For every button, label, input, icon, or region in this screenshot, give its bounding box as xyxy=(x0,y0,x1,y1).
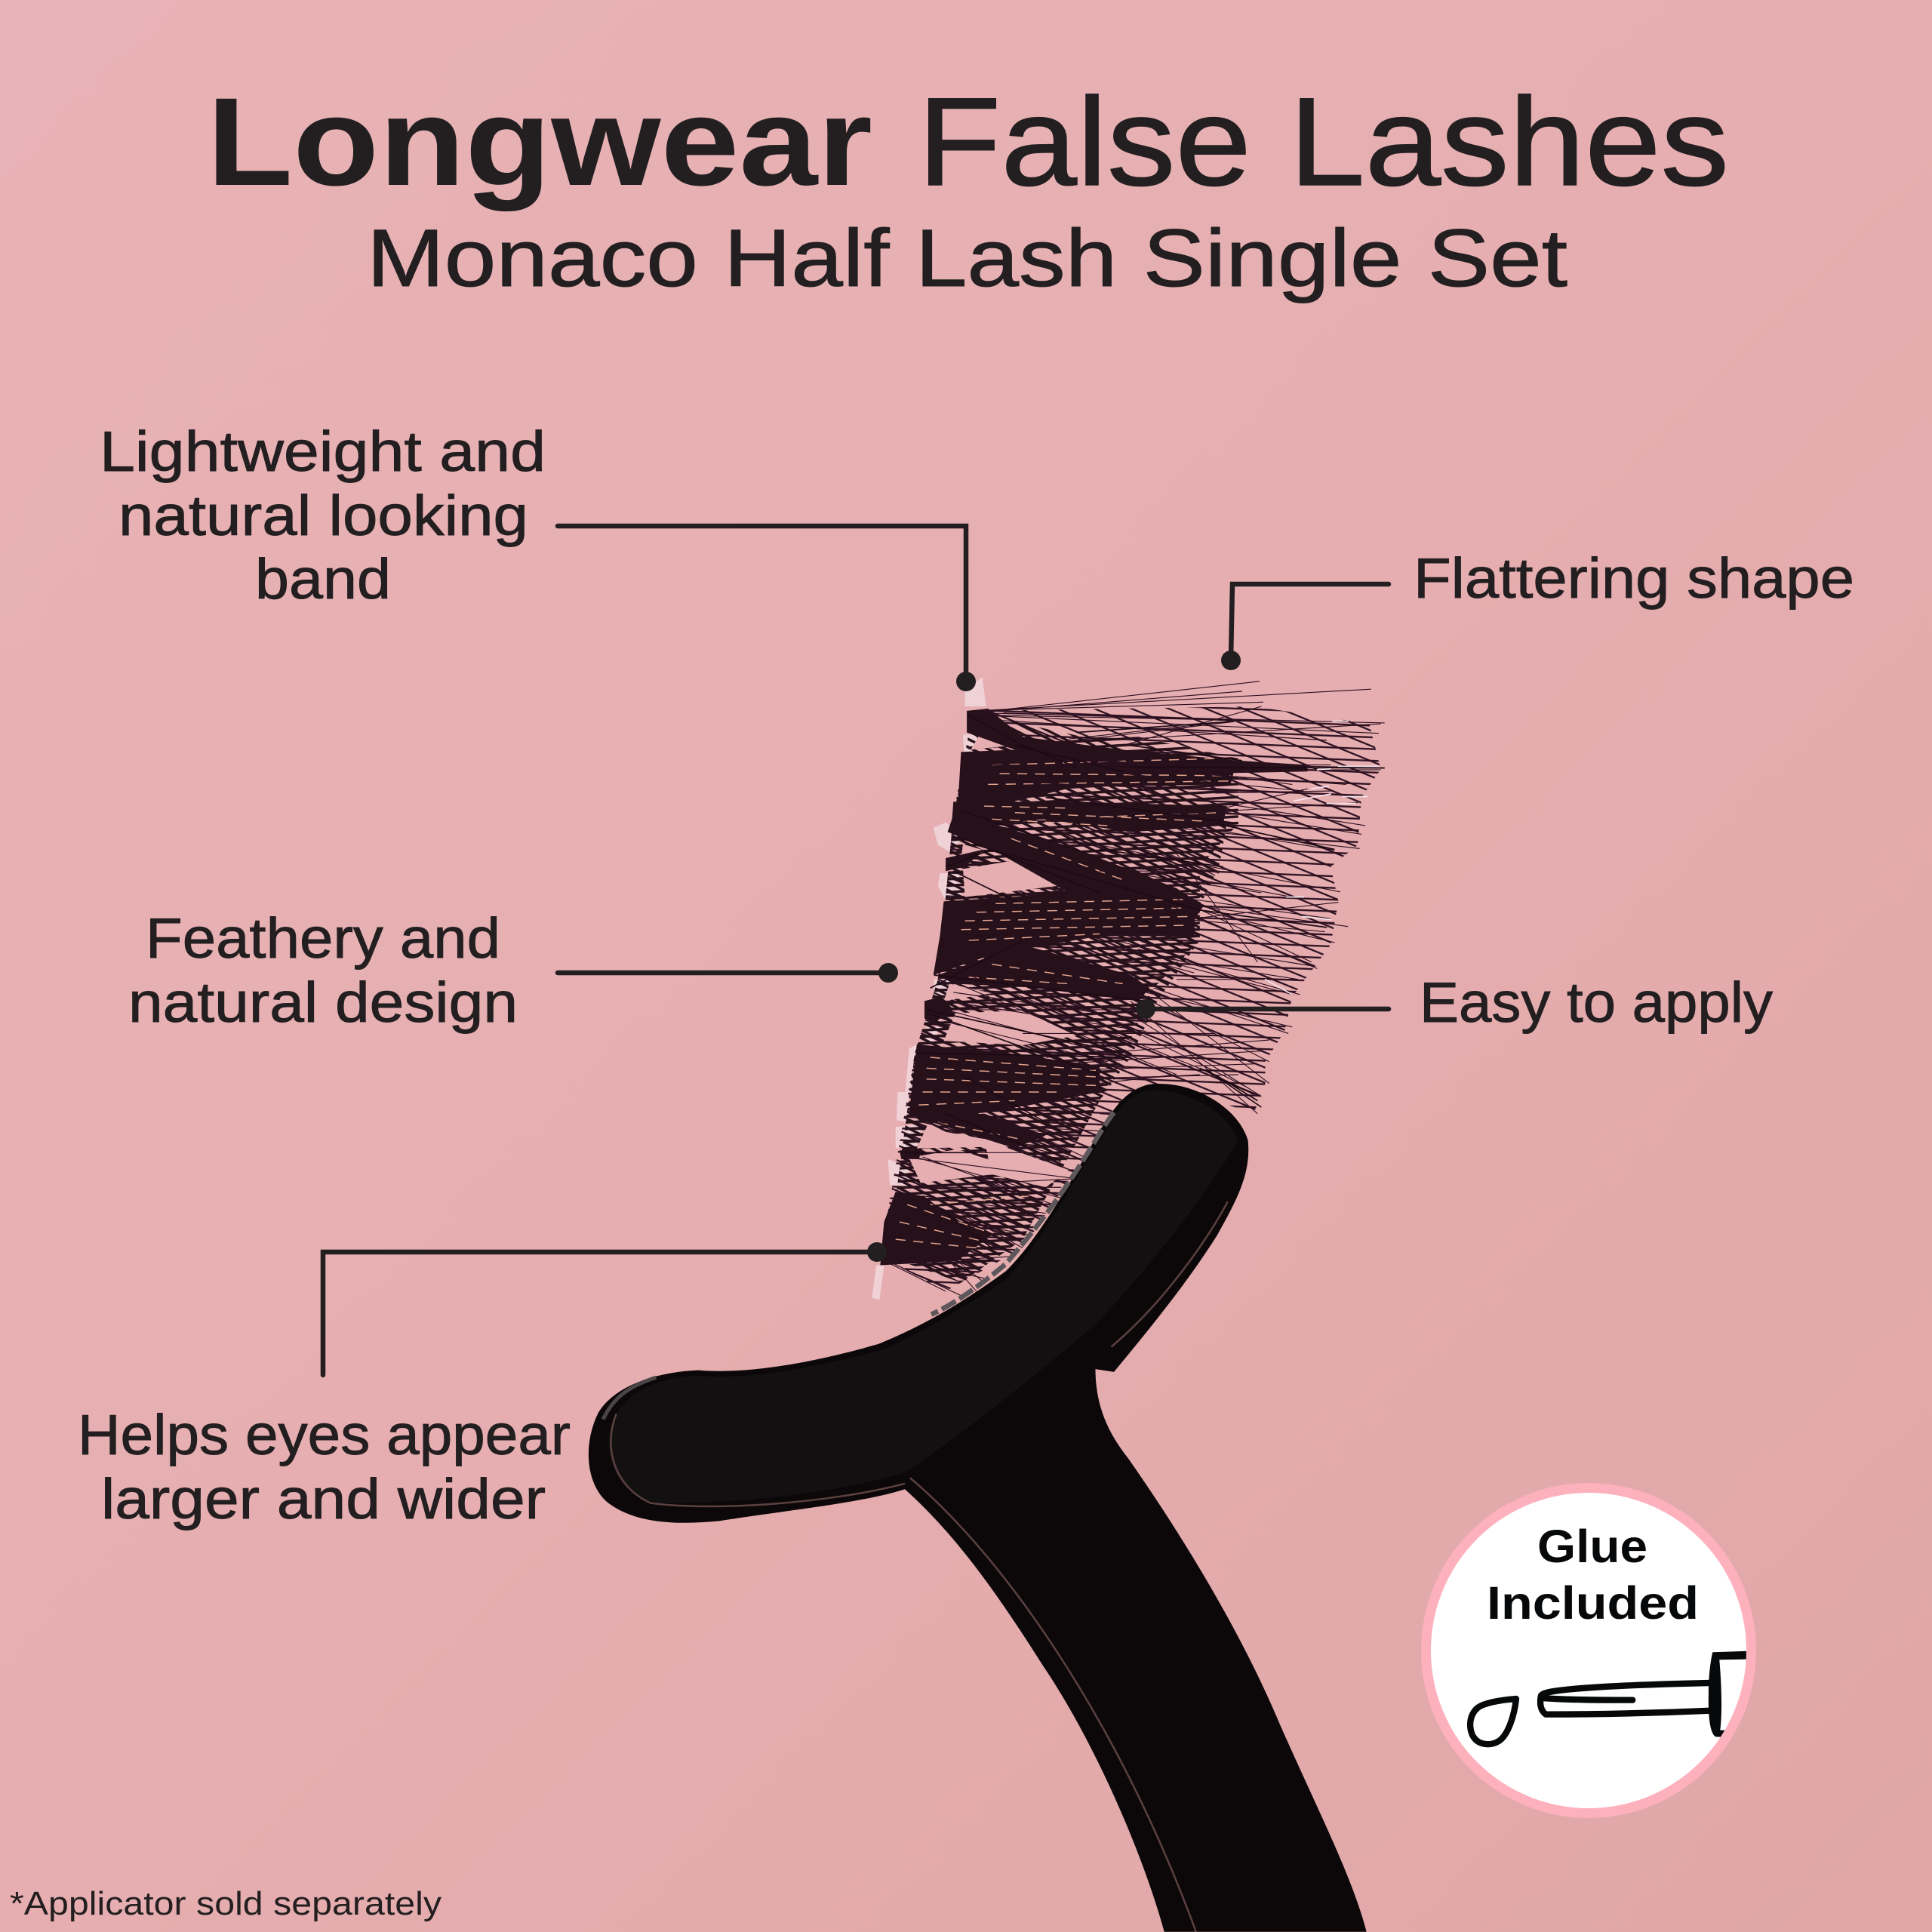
label: natural looking xyxy=(118,484,528,547)
callout: flattering shape xyxy=(1221,546,1854,670)
label: Helps eyes appear xyxy=(78,1403,571,1466)
leader line xyxy=(558,526,966,679)
footnote: *Applicator sold separately xyxy=(10,1885,441,1922)
leader line xyxy=(323,1252,875,1375)
callout: easy to apply xyxy=(1136,971,1774,1034)
highlight on pad xyxy=(603,1377,656,1420)
brown rim lines xyxy=(611,1201,1228,1932)
title xyxy=(207,72,1729,212)
label: Easy to apply xyxy=(1420,971,1774,1034)
label: Lightweight and xyxy=(100,420,546,483)
badge text: Included xyxy=(1487,1577,1699,1629)
dense lash clusters xyxy=(880,709,1308,1266)
title: Longwear xyxy=(207,72,872,212)
applicator handle and pad silhouette xyxy=(589,1084,1367,1932)
callout: helps eyes appear larger xyxy=(78,1242,887,1531)
icon: glue dropper and drop xyxy=(1470,1651,1756,1744)
lash photo xyxy=(872,677,1385,1300)
label: larger and wider xyxy=(101,1467,546,1531)
callout: lightweight band xyxy=(100,420,976,691)
label: band xyxy=(255,547,391,611)
leader line xyxy=(1146,1007,1389,1011)
label: Feathery and xyxy=(146,906,500,970)
label xyxy=(128,906,518,1034)
gaps between lash clusters xyxy=(909,731,1077,1187)
applicator pad surface xyxy=(609,1090,1238,1503)
individual lash hairs xyxy=(880,681,1385,1296)
label: Flattering shape xyxy=(1414,546,1854,610)
clear lash band xyxy=(872,677,986,1300)
dense inner lash field xyxy=(888,713,1238,1283)
badge text xyxy=(1487,1521,1699,1629)
lash tip glints xyxy=(1266,721,1379,994)
label xyxy=(78,1403,571,1531)
applicator tool xyxy=(589,1084,1367,1932)
badge text: Glue xyxy=(1537,1521,1647,1572)
leader line xyxy=(558,971,888,975)
pink gaps between lashes xyxy=(896,758,1231,1248)
subtitle: Monaco Half Lash Single Set xyxy=(367,212,1567,303)
label: natural design xyxy=(128,971,518,1034)
badge circle xyxy=(1426,1488,1751,1813)
gray felt edge of pad xyxy=(931,1112,1114,1315)
sparse outer lash field xyxy=(880,706,1381,1291)
badge: glue included xyxy=(1426,1488,1756,1813)
label xyxy=(100,420,546,611)
title: False Lashes xyxy=(918,72,1729,212)
leader line xyxy=(1231,584,1389,658)
callout: feathery design xyxy=(128,906,898,1034)
